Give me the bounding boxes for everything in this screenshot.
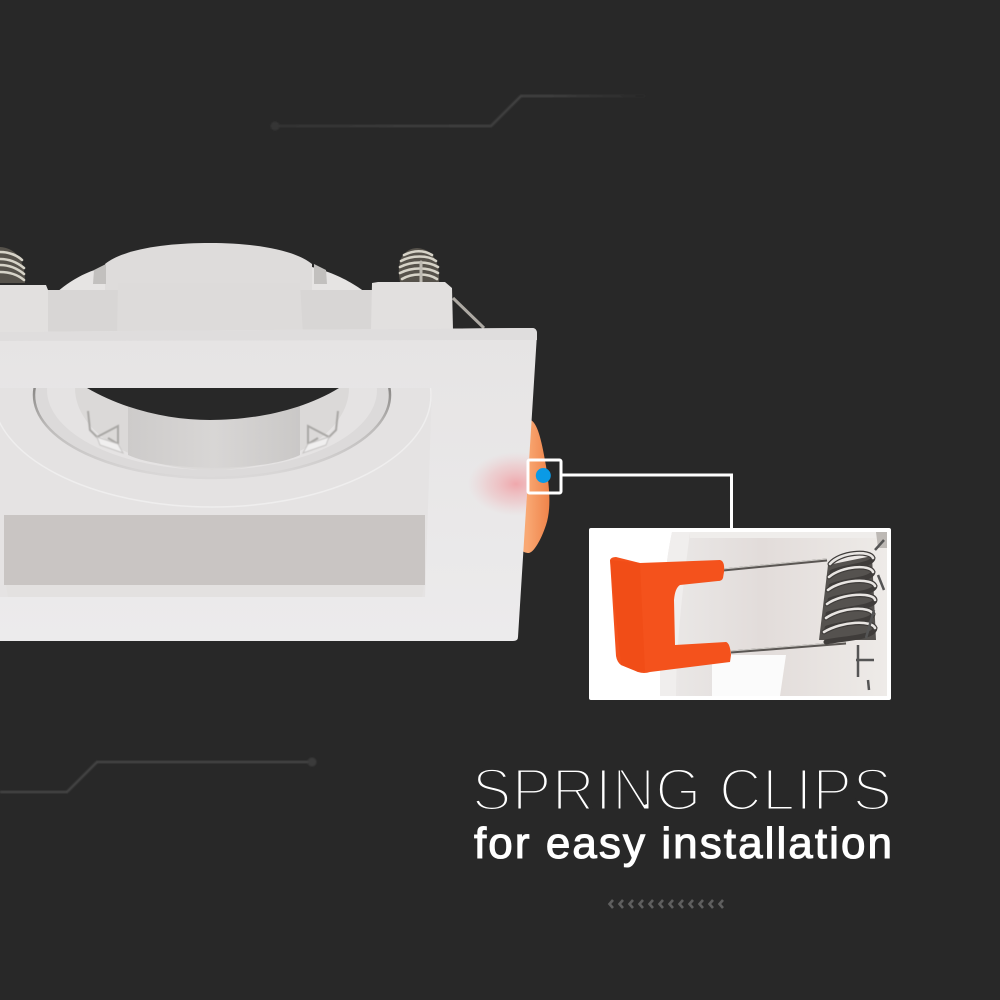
blue dot (536, 468, 551, 483)
rear wire (453, 298, 484, 328)
left tab (88, 411, 123, 453)
top wire (723, 559, 827, 570)
housing right block (371, 282, 453, 330)
product: recessed downlight fitting (0, 243, 564, 641)
orange clip handle (610, 557, 731, 673)
inner ring groove (32, 388, 392, 479)
icon: right screw spring (399, 248, 439, 284)
lens cylinder (128, 405, 300, 468)
housing centre block (117, 283, 303, 335)
right tab (303, 411, 338, 453)
callout marker (528, 460, 561, 493)
flange opening (4, 388, 432, 597)
rear disc (57, 256, 365, 292)
circuit line: bottom (0, 758, 316, 792)
callout connector line (561, 475, 732, 528)
dark shadow behind spring (819, 556, 876, 640)
inner cup (47, 388, 377, 469)
spring coil (824, 553, 875, 642)
flange (0, 328, 537, 641)
inset photo: spring clip close-up (589, 528, 891, 700)
housing left block (0, 285, 48, 335)
lower recess wall (4, 515, 425, 585)
clip handle shading (610, 560, 640, 672)
red reflection (476, 458, 527, 510)
dark aperture (87, 388, 339, 420)
flange top bevel (0, 328, 537, 341)
fitting surface (660, 532, 887, 696)
housing back (0, 290, 400, 335)
circuit line: top (270, 96, 645, 130)
chevron row (610, 900, 723, 908)
infographic canvas (0, 94, 891, 909)
heading: SPRING CLIPS: SPRING CLIPS (472, 757, 892, 823)
dome top (105, 243, 312, 290)
printed marks (856, 540, 884, 690)
bottom wire (731, 642, 846, 652)
subheading: for easy installation: for easy installation (474, 819, 892, 868)
icon: left screw spring (0, 247, 25, 283)
side orange clip (518, 420, 549, 553)
outer ring (0, 388, 432, 508)
